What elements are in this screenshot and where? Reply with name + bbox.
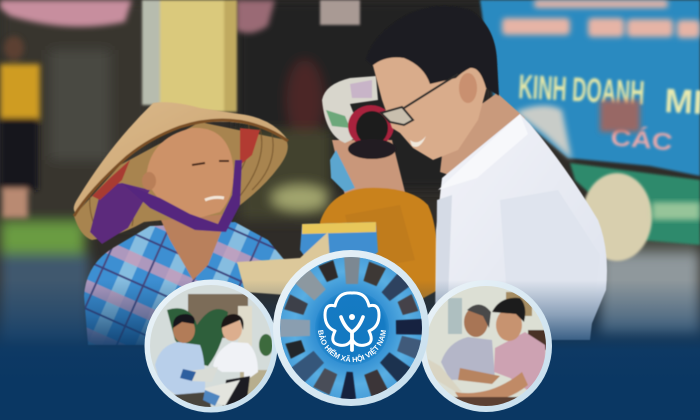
man shirt	[155, 342, 205, 396]
hat cone	[74, 102, 288, 214]
green shop sign	[570, 163, 700, 245]
woman in conical hat	[74, 102, 288, 345]
skyscrapers seen from below	[280, 256, 424, 400]
woman head	[222, 317, 242, 341]
neck and chest	[150, 196, 232, 280]
elder shirt	[441, 337, 495, 380]
hat underside	[74, 122, 288, 240]
headscarf	[322, 76, 378, 143]
papers	[192, 367, 218, 382]
pink awning	[236, 0, 275, 33]
paper	[426, 358, 462, 392]
open page	[237, 232, 330, 296]
round woven tray	[582, 173, 652, 261]
blue banner with blurred lettering: CÁC	[609, 123, 674, 156]
leaflet held up	[237, 222, 378, 296]
shirt shadow	[436, 195, 452, 300]
floor	[240, 370, 267, 396]
pink market umbrella	[0, 0, 132, 27]
logo disc	[315, 291, 389, 365]
neck	[332, 140, 405, 196]
chin strap	[122, 160, 242, 232]
elder head	[464, 307, 488, 337]
building windows	[188, 294, 248, 338]
hair bun	[348, 105, 394, 147]
centre round badge with logo	[273, 250, 429, 406]
hair	[366, 6, 499, 96]
neck	[440, 93, 525, 182]
face	[146, 128, 233, 222]
plaid shirt	[84, 222, 286, 345]
blue banner with blurred lettering	[480, 0, 700, 176]
navy fade at the bottom	[0, 280, 700, 420]
smile	[410, 136, 426, 147]
logo flower emblem	[325, 293, 379, 350]
potted plant right	[259, 334, 273, 356]
young man head	[496, 309, 522, 341]
face	[372, 40, 490, 160]
eyes and mouth	[192, 161, 229, 200]
right round photo: officer reading with elder	[420, 280, 552, 412]
white shirt	[435, 114, 607, 340]
ear	[142, 172, 156, 190]
yellow pillar	[142, 0, 237, 112]
glasses	[381, 74, 458, 125]
table	[454, 396, 518, 406]
bystander in yellow shirt	[0, 36, 40, 218]
logo curved name: BẢO HIỂM XÃ HỘI VIỆT NAM	[318, 330, 386, 362]
woman behind in orange shirt	[320, 76, 438, 300]
palm plant	[167, 308, 228, 366]
red hat lining	[240, 128, 260, 165]
white sack beside shoulder	[515, 105, 572, 160]
picture frame	[506, 292, 532, 316]
purple scarf bundle	[90, 183, 150, 244]
shirt collar	[438, 114, 528, 190]
blue leaflet page	[300, 222, 378, 292]
red hat lining left	[92, 160, 130, 200]
young man shirt	[494, 332, 545, 392]
sign lettering	[652, 202, 700, 220]
chair	[528, 330, 550, 350]
left round photo: officer with man	[144, 280, 280, 412]
orange blouse	[320, 188, 438, 300]
man in white shirt	[366, 6, 607, 340]
hat ribs	[90, 122, 273, 238]
man head	[173, 317, 195, 343]
face mask	[330, 150, 355, 192]
arm	[454, 372, 528, 398]
white sign	[320, 0, 360, 25]
ear	[459, 73, 477, 103]
woman shirt	[213, 342, 258, 382]
